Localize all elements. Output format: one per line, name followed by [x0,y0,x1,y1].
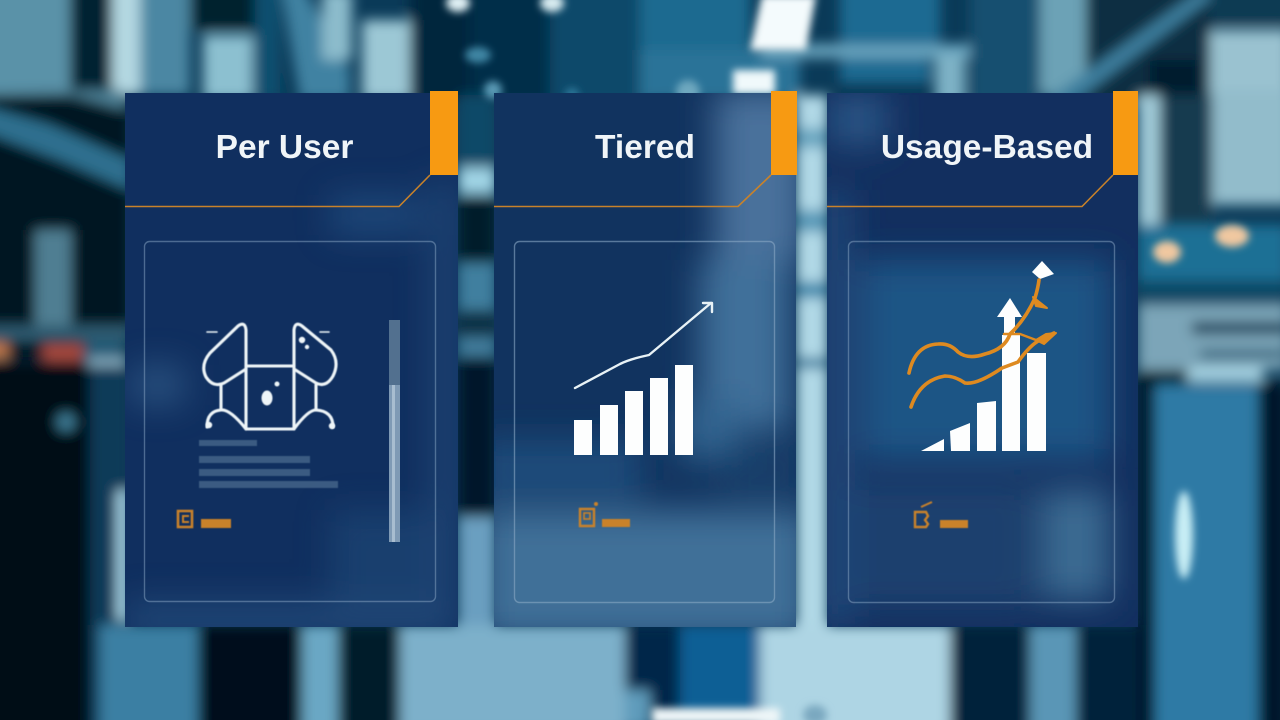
right side [1138,95,1162,225]
top-left racks [0,0,70,105]
orange header rule [494,175,771,206]
gap 2 [796,95,828,635]
inner frame [848,242,1114,602]
orange tab [430,91,458,175]
panel background [125,93,458,627]
panel shading [125,180,460,640]
orange header rule [827,175,1113,206]
trend arrow [575,303,712,388]
gap 1 [458,95,496,165]
floor & bottom [100,625,198,720]
badge icon [580,502,630,527]
placeholder text lines [199,440,338,488]
panel: Usage-Based [827,91,1138,627]
heading: Tiered: Tiered [595,129,695,166]
panel shading [494,93,796,627]
panel background [827,93,1138,627]
heading: Usage-Based: Usage-Based [881,129,1093,166]
vertical progress bar [389,320,400,542]
badge icon [915,502,968,528]
inner frame [144,242,436,602]
left side [0,95,130,355]
orange header rule [125,175,430,206]
orange tab [1113,91,1138,175]
orange usage curves [909,280,1056,407]
panel: Per User [125,91,458,627]
panel: Tiered [494,91,797,627]
orange tab [771,91,797,175]
heading: Per User: Per User [216,129,353,166]
bar chart with up arrow [921,261,1054,451]
icon: tag-shaped outline illustration [204,324,336,429]
icon dots [206,337,335,429]
badge icon [178,511,231,528]
top centre [640,0,750,50]
panel shading [820,95,1110,630]
panel background [494,93,796,627]
bar chart [574,365,693,455]
inner frame [514,242,774,602]
